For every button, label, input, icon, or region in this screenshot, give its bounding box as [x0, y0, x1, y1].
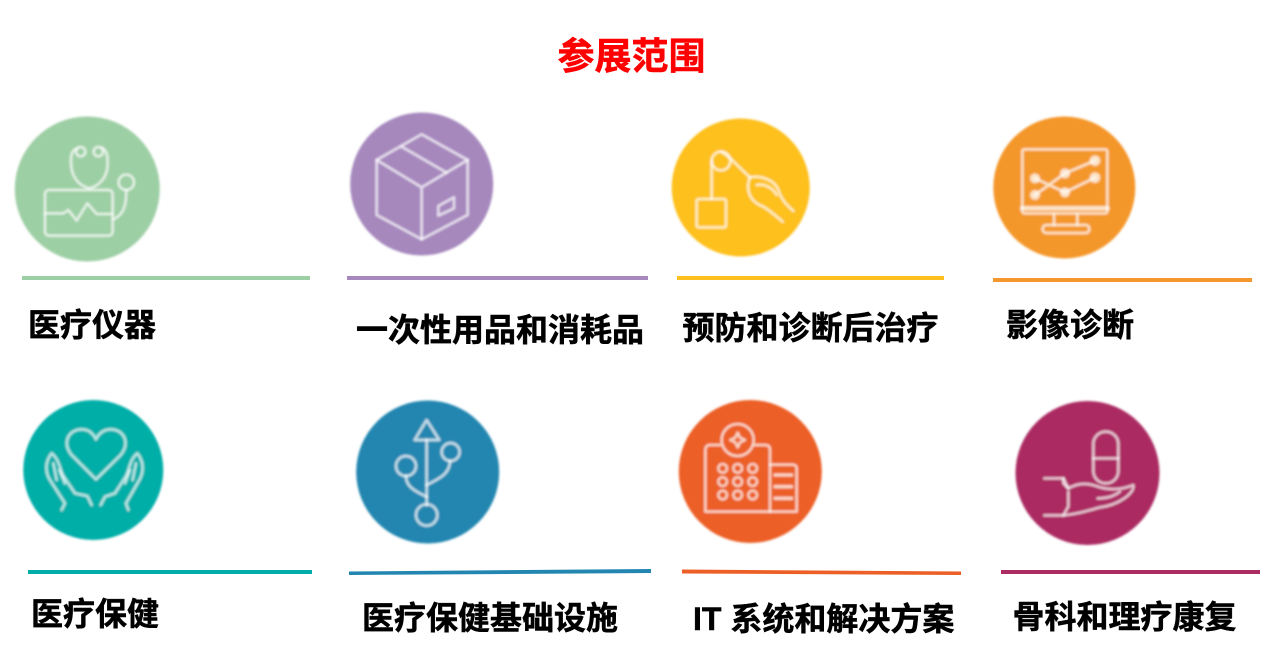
- icon: monitor with chart: [993, 116, 1135, 258]
- icon: stethoscope and monitor: [15, 116, 160, 262]
- panel: orthopedics and rehabilitation: [1001, 401, 1260, 635]
- divider: infrastructure: [349, 569, 651, 575]
- label: medical devices: 医疗仪器: [28, 307, 156, 343]
- title: 参展范围: [558, 36, 706, 77]
- divider: disposables: [347, 276, 648, 280]
- label: prevention: 预防和诊断后治疗: [682, 310, 939, 346]
- label: healthcare: 医疗保健: [31, 596, 159, 632]
- panel: healthcare: [23, 400, 312, 632]
- panel: disposables and consumables: [347, 112, 648, 348]
- icon: heart in hands: [23, 400, 163, 540]
- icon: box: [350, 112, 493, 256]
- panel: medical devices: [15, 116, 310, 343]
- label: imaging: 影像诊断: [1006, 307, 1134, 343]
- icon: USB symbol: [356, 400, 499, 544]
- label: disposables: 一次性用品和消耗品: [356, 312, 644, 348]
- panel: imaging diagnostics: [993, 116, 1252, 343]
- label: IT: IT 系统和解决方案: [693, 601, 954, 637]
- label: orthopedics: 骨科和理疗康复: [1012, 599, 1237, 635]
- panel: IT systems and solutions: [679, 400, 961, 637]
- divider: IT: [682, 570, 961, 575]
- divider: imaging: [993, 278, 1252, 282]
- divider: orthopedics: [1001, 570, 1260, 574]
- panel: healthcare infrastructure: [349, 400, 651, 636]
- divider: prevention: [677, 276, 944, 280]
- icon: hand holding capsule: [1016, 401, 1160, 545]
- divider: medical devices: [22, 276, 310, 280]
- icon: hospital building: [679, 400, 822, 543]
- divider: healthcare: [28, 570, 312, 574]
- icon: pulley and hand: [672, 118, 810, 256]
- label: infrastructure: 医疗保健基础设施: [362, 600, 618, 636]
- panel: prevention and post-diagnosis treatment: [672, 118, 944, 346]
